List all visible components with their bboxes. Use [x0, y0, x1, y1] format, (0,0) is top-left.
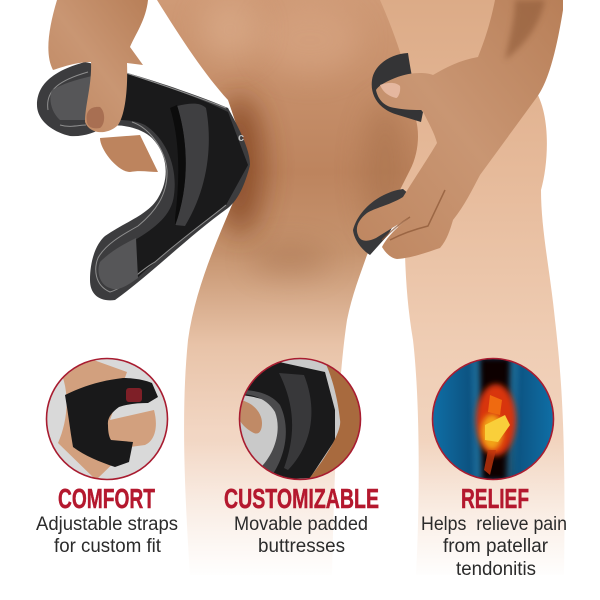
- text: from patellar: from patellar: [443, 536, 549, 557]
- photo: upper pad: [372, 53, 423, 122]
- text: for custom fit: for custom fit: [54, 536, 162, 557]
- photo: right hand and arm: [357, 0, 563, 259]
- buttress dark edge: [170, 105, 186, 226]
- thumb nail: [87, 107, 104, 128]
- photo: left hand and thumb: [48, 0, 148, 132]
- circle outline: [432, 358, 554, 480]
- photo: front leg with shading: [150, 0, 430, 575]
- wrist shadow: [505, 0, 545, 60]
- photo: back leg: [370, 0, 565, 575]
- photo: left hand fingers behind brace: [100, 135, 158, 172]
- brace outer edge: [37, 62, 250, 300]
- text: tendonitis: tendonitis: [456, 559, 536, 580]
- finger crease: [382, 190, 445, 240]
- velcro patch bottom: [98, 238, 138, 289]
- panel: customizable: [224, 358, 379, 557]
- brace inner black panel: [118, 73, 248, 278]
- fade of legs into white: [170, 440, 580, 580]
- text: buttresses: buttresses: [258, 536, 345, 557]
- stitching lines: [48, 72, 226, 292]
- heading: comfort: COMFORT: [58, 483, 155, 514]
- movable buttress pad: [175, 104, 209, 226]
- heading: customizable: CUSTOMIZABLE: [224, 483, 379, 514]
- panel: comfort: [36, 358, 178, 557]
- heading: relief: RELIEF: [461, 483, 529, 514]
- circle image: inflamed knee x-ray: [432, 358, 554, 480]
- thumb nail right: [380, 83, 400, 98]
- text: adjustable straps: Adjustable straps: [36, 514, 178, 535]
- velcro patch top: [50, 76, 92, 120]
- text: movable padded: Movable padded: [234, 514, 368, 535]
- circle photo: brace detail: [239, 358, 365, 480]
- brace logo mark: c: [238, 132, 244, 144]
- knee brace held open: [37, 62, 250, 300]
- circle outline: [240, 358, 360, 480]
- circle photo: strap on knee: [46, 358, 168, 480]
- panel: relief: [421, 358, 567, 580]
- photo: lower pad: [353, 189, 410, 255]
- text: helps relieve pain: Helps relieve pain: [421, 514, 567, 535]
- circle outline: [46, 358, 168, 480]
